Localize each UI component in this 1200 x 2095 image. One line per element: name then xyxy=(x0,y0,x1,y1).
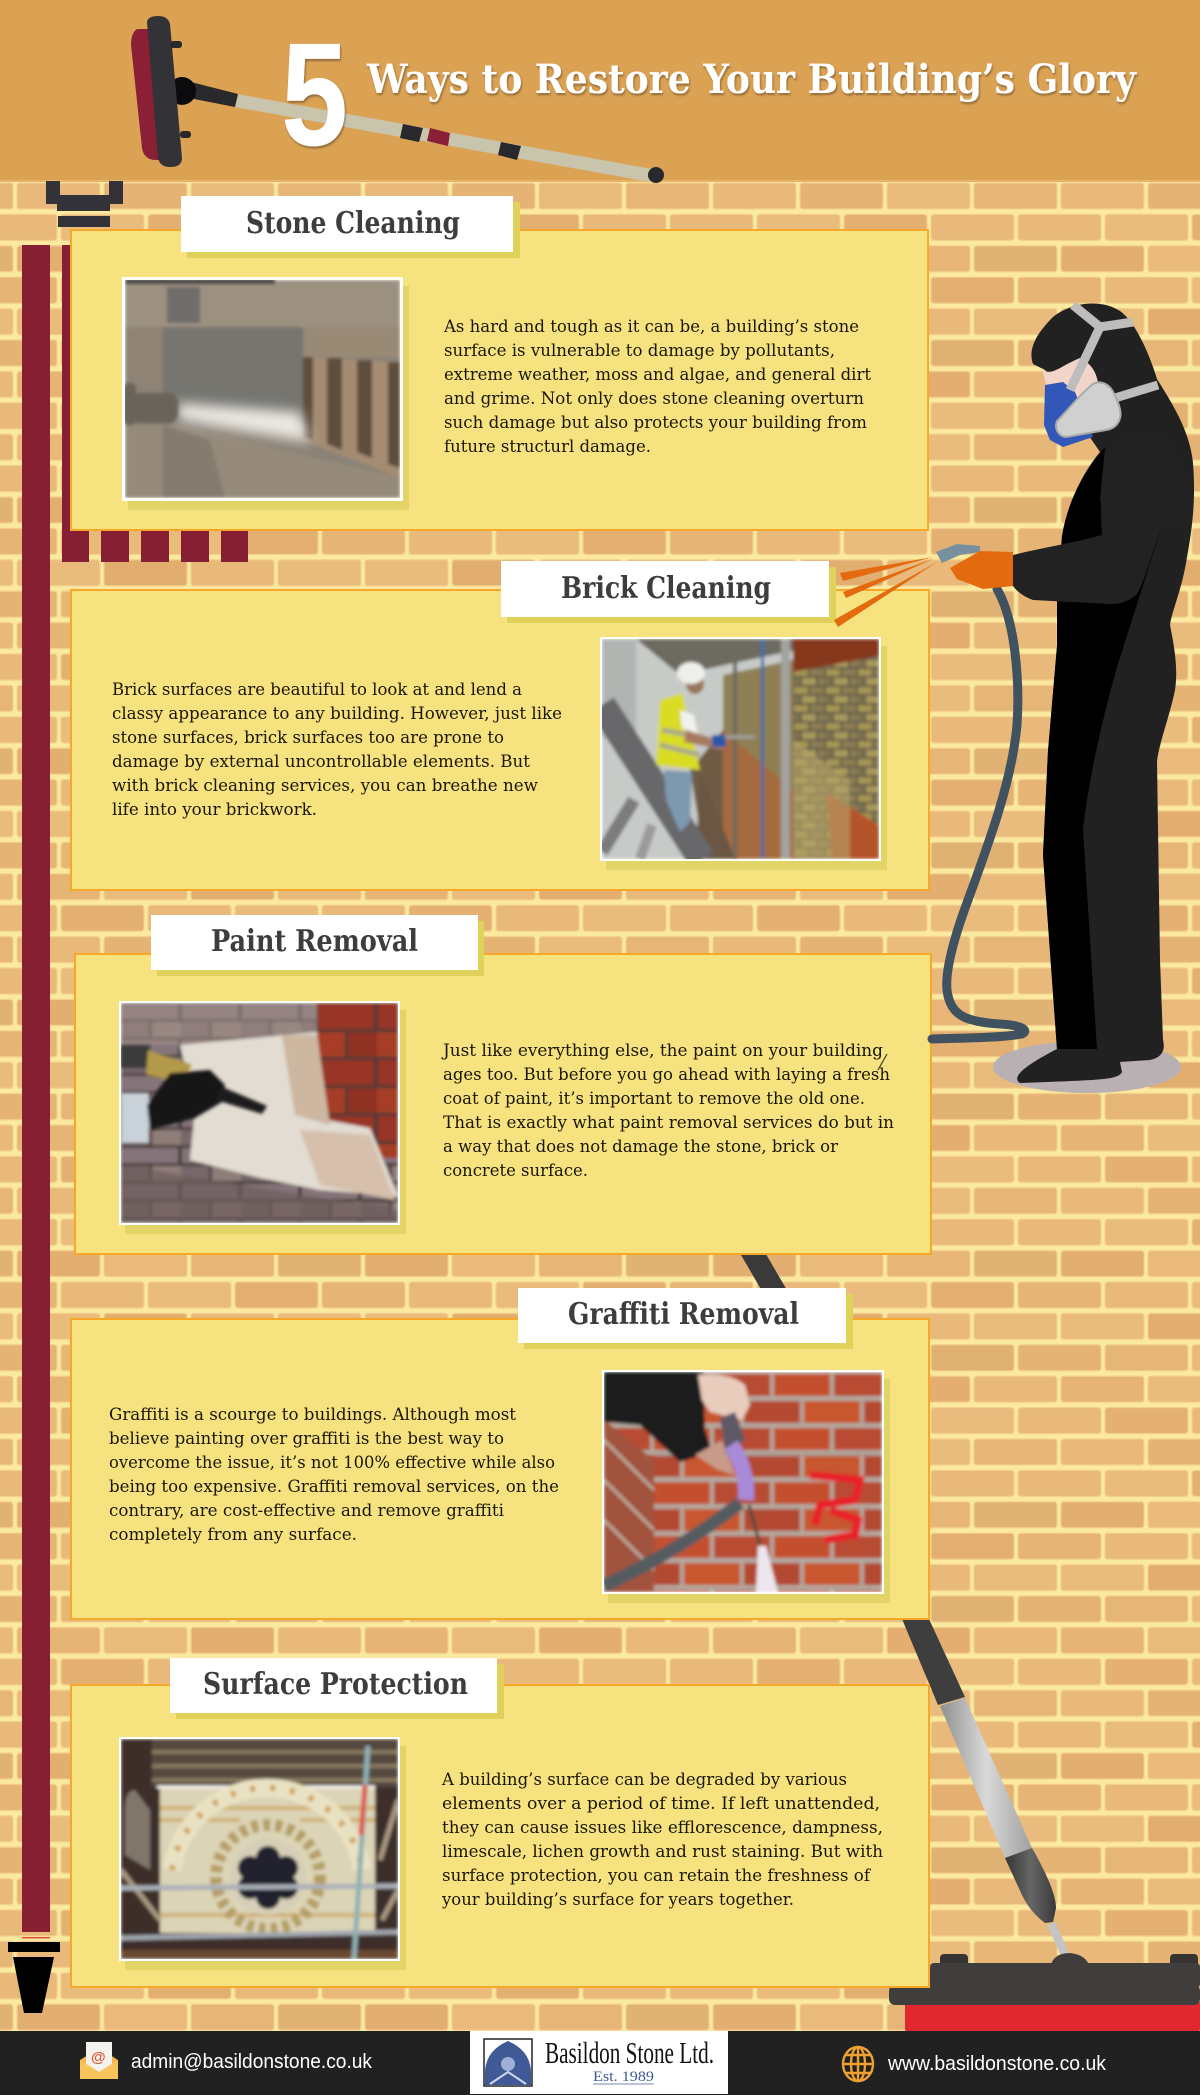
icon: email envelope: @ xyxy=(91,2049,106,2066)
worker respirator mask xyxy=(1044,305,1158,447)
icon: brush with long pole xyxy=(131,16,664,183)
body text: brick cleaning: with brick cleaning services, you can breathe new xyxy=(112,776,538,795)
body text: surface protection: limescale, lichen growth and rust staining. But with xyxy=(442,1842,883,1861)
body text: brick cleaning: damage by external uncontrollable elements. But xyxy=(112,752,530,771)
logo wordmark: Basildon Stone Ltd. xyxy=(545,2035,714,2070)
heading tab: surface protection xyxy=(170,1658,504,1719)
body text: surface protection: your building’s surface for years together. xyxy=(441,1890,794,1909)
photo: rose window under scaffold xyxy=(119,1737,406,1970)
body text: surface protection: surface protection, you can retain the freshness of xyxy=(442,1866,872,1885)
heading tab: brick cleaning xyxy=(501,561,836,623)
body text: stone cleaning: extreme weather, moss and algae, and general dirt xyxy=(444,365,871,384)
spray gun xyxy=(936,544,980,563)
body text: brick cleaning: classy appearance to any building. However, just like xyxy=(112,704,562,723)
small stray mark xyxy=(878,1054,887,1070)
body text: surface protection: they can cause issues like efflorescence, dampness, xyxy=(442,1818,883,1837)
maroon second pipe with dashes xyxy=(62,245,248,562)
body text: graffiti removal: completely from any surface. xyxy=(109,1525,357,1544)
body text: paint removal xyxy=(441,1041,894,1180)
pipe top nozzle xyxy=(46,181,123,227)
body text: brick cleaning xyxy=(112,680,562,819)
panel: paint removal xyxy=(75,915,931,1254)
heading tab: stone cleaning: Stone Cleaning xyxy=(246,206,460,241)
footer band xyxy=(0,2031,1200,2095)
body text: graffiti removal: Graffiti is a scourge to buildings. Although most xyxy=(109,1405,516,1424)
hose xyxy=(932,589,1025,1039)
body text: paint removal: That is exactly what paint removal services do but in xyxy=(443,1113,894,1132)
worker glove xyxy=(950,551,1013,589)
logo block xyxy=(470,2031,728,2094)
body text: stone cleaning: future structurl damage. xyxy=(444,437,651,456)
maroon main pipe xyxy=(22,245,50,1932)
big numeral 5: 5 xyxy=(281,13,348,177)
body text: paint removal: coat of paint, it’s important to remove the old one. xyxy=(443,1089,865,1108)
photo: washing graffiti off a wall xyxy=(602,1370,890,1603)
pipe bottom nozzle xyxy=(8,1937,60,2013)
body text: brick cleaning: Brick surfaces are beautiful to look at and lend a xyxy=(112,680,522,699)
body text: graffiti removal: overcome the issue, it’s not 100% effective while also xyxy=(109,1453,555,1472)
body text: stone cleaning xyxy=(443,317,871,456)
body text: surface protection xyxy=(441,1770,883,1909)
body text: graffiti removal xyxy=(109,1405,559,1544)
floor shadow under worker xyxy=(993,1041,1181,1093)
body text: stone cleaning: As hard and tough as it can be, a building’s stone xyxy=(443,317,859,336)
panel: graffiti removal xyxy=(71,1288,929,1619)
panel: surface protection xyxy=(71,1658,929,1987)
body text: stone cleaning: such damage but also protects your building from xyxy=(444,413,867,432)
email address: admin@basildonstone.co.uk xyxy=(131,2051,373,2073)
body text: surface protection: A building’s surface can be degraded by various xyxy=(441,1770,847,1789)
spray jets xyxy=(834,557,937,627)
icon: globe xyxy=(843,2047,873,2081)
body text: paint removal: concrete surface. xyxy=(443,1161,588,1180)
body text: brick cleaning: life into your brickwork. xyxy=(112,800,317,819)
heading tab: graffiti removal xyxy=(518,1288,853,1349)
panel: stone cleaning xyxy=(71,196,928,530)
body text: graffiti removal: believe painting over graffiti is the best way to xyxy=(109,1429,504,1448)
logo icon: gothic window xyxy=(484,2039,532,2086)
worker face xyxy=(1042,358,1098,400)
pole upper segment between panels xyxy=(745,1240,780,1300)
title: Ways to Restore Your Building’s Glory xyxy=(366,56,1138,103)
heading tab: paint removal xyxy=(151,915,484,976)
heading tab: paint removal: Paint Removal xyxy=(211,924,418,959)
photo: paint being blasted off bricks xyxy=(119,1001,406,1234)
heading tab: stone cleaning xyxy=(181,196,520,258)
heading tab: surface protection: Surface Protection xyxy=(203,1667,468,1702)
panel: brick cleaning xyxy=(71,561,929,890)
header band xyxy=(0,0,1200,182)
body text: paint removal: Just like everything else, the paint on your building xyxy=(441,1041,883,1060)
body text: paint removal: ages too. But before you go ahead with laying a fresh xyxy=(443,1065,890,1084)
body text: paint removal: a way that does not damage the stone, brick or xyxy=(443,1137,838,1156)
photo: pressure washing stone xyxy=(122,277,409,510)
icon: email envelope xyxy=(80,2042,118,2079)
body text: brick cleaning: stone surfaces, brick surfaces too are prone to xyxy=(112,728,504,747)
body text: graffiti removal: being too expensive. Graffiti removal services, on the xyxy=(109,1477,559,1496)
heading tab: brick cleaning: Brick Cleaning xyxy=(561,571,771,606)
logo established date: Est. 1989 xyxy=(593,2069,654,2085)
body text: surface protection: elements over a period of time. If left unattended, xyxy=(442,1794,880,1813)
body text: stone cleaning: and grime. Not only does stone cleaning overturn xyxy=(444,389,864,408)
photo: worker on scaffold xyxy=(600,637,887,870)
worker figure xyxy=(950,303,1194,1083)
cleaning machine with pole xyxy=(889,1619,1200,2032)
heading tab: graffiti removal: Graffiti Removal xyxy=(568,1297,799,1332)
website address: www.basildonstone.co.uk xyxy=(887,2053,1107,2075)
body text: graffiti removal: contrary, are cost-effective and remove graffiti xyxy=(109,1501,504,1520)
body text: stone cleaning: surface is vulnerable to damage by pollutants, xyxy=(444,341,835,360)
